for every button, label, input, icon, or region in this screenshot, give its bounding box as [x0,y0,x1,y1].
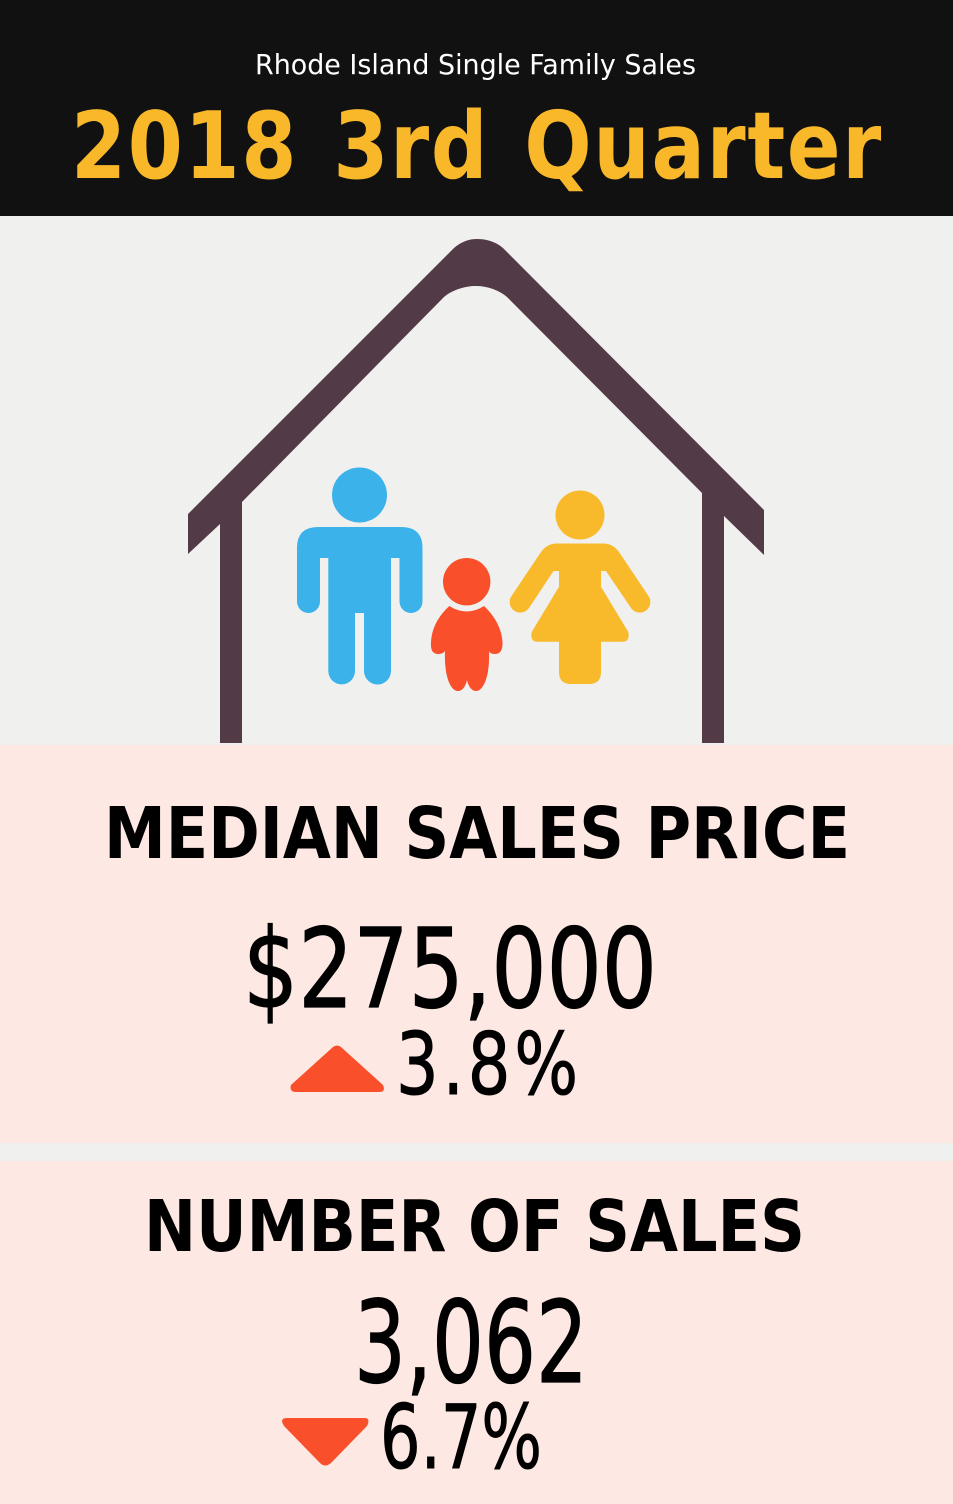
change value: 6.7% [380,1386,542,1489]
panel: median sales price [0,745,953,1143]
header band [0,0,953,216]
icon: child [431,558,503,691]
icon: man [297,468,422,684]
icon: down arrow [282,1418,368,1466]
panel: number of sales [0,1161,953,1504]
icon: up arrow [291,1046,384,1092]
value: 3,062 [354,1277,588,1409]
subtitle: Rhode Island Single Family Sales [255,48,696,81]
change value: 3.8% [396,1015,582,1115]
icon: house outline [188,239,764,743]
value: $275,000 [243,905,657,1033]
heading: MEDIAN SALES PRICE [104,792,850,875]
icon: woman [510,490,650,684]
heading: NUMBER OF SALES [144,1185,805,1268]
